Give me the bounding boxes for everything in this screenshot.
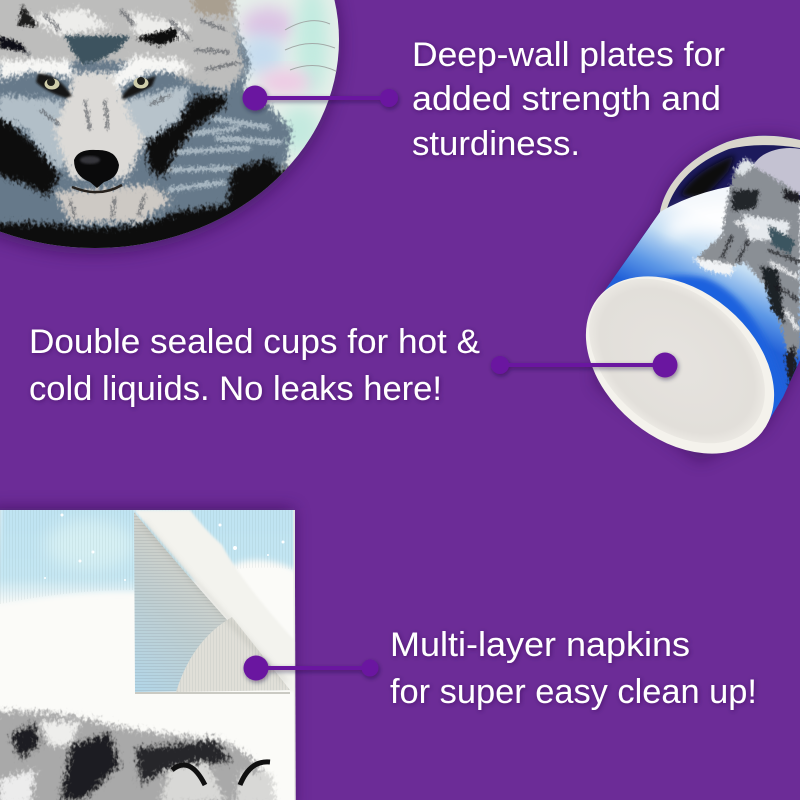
callout: cup connector: [491, 352, 678, 378]
text block: cups: cold liquids. No leaks here!: [29, 370, 442, 408]
text block: cups: Double sealed cups for hot &: [29, 323, 480, 361]
wolf tan fur tuft: [190, 0, 235, 18]
napkin top fold white: [134, 510, 294, 692]
wolf head fur, upper ruff: [0, 0, 244, 92]
napkin sleeping wolf: [0, 711, 275, 800]
wolf chest fur: [166, 118, 282, 190]
napkin stars: [44, 514, 284, 581]
callout: napkin connector: [244, 656, 378, 680]
text block: cups: [29, 323, 480, 408]
wolf fine fur streaks: [10, 10, 240, 218]
wolf face pale fur: [0, 8, 192, 222]
wolf eyes: [36, 74, 156, 99]
callout: plate connector: [242, 86, 398, 110]
panel: napkin: [0, 505, 300, 800]
text block: plates: added strength and: [412, 80, 721, 118]
text block: napkins: [390, 626, 757, 711]
cup howling wolf: [692, 158, 800, 392]
text block: plates: Deep-wall plates for: [412, 36, 725, 74]
wolf silhouette: [0, 18, 296, 248]
text block: plates: sturdiness.: [412, 125, 580, 163]
panel: paper cup: [586, 130, 800, 465]
wolf black markings: [0, 94, 290, 262]
wolf nose and mouth: [72, 150, 122, 192]
cup sky: [603, 182, 800, 430]
cup rim: [650, 130, 800, 230]
napkin fold: [134, 512, 290, 692]
text block: napkins: for super easy clean up!: [390, 673, 757, 711]
text block: plates: [412, 36, 725, 163]
cup moon: [752, 148, 800, 196]
text block: napkins: Multi-layer napkins: [390, 626, 690, 664]
cup base: [551, 240, 800, 490]
panel: wolf plate: [0, 0, 350, 262]
napkin wolf ears: [172, 762, 270, 785]
napkin sky: [0, 510, 295, 602]
wolf brow markings: [0, 5, 178, 64]
